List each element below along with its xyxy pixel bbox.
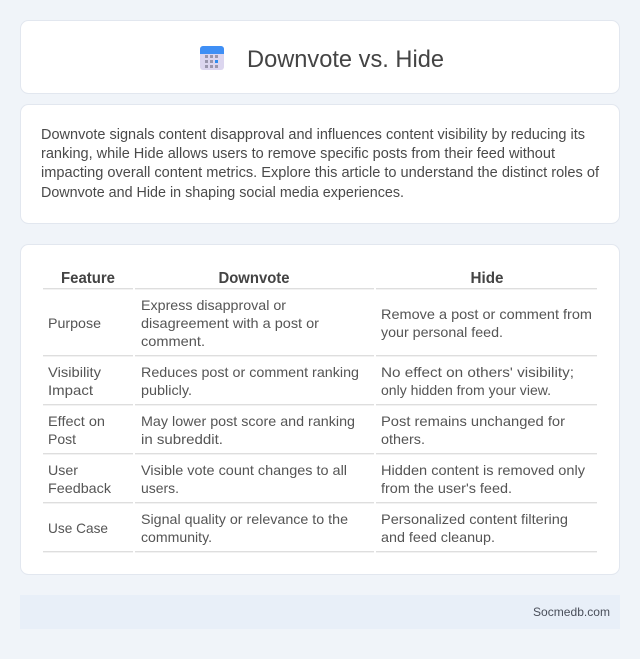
row: effect on post: Post bbox=[48, 431, 76, 447]
footer text: Socmedb.com bbox=[533, 605, 610, 619]
row: effect on post: in subreddit. bbox=[141, 431, 223, 447]
table card bbox=[20, 244, 620, 574]
row: effect on post: others. bbox=[381, 431, 425, 447]
row: visibility impact: publicly. bbox=[141, 382, 192, 398]
intro card bbox=[20, 104, 620, 224]
table header: Feature bbox=[61, 270, 115, 287]
table header: Hide bbox=[470, 270, 504, 287]
row: user feedback: Hidden content is removed only bbox=[381, 462, 585, 478]
row: user feedback: User bbox=[48, 462, 78, 478]
intro text: impacting overall content metrics. Explore this article to understand the distinct roles of bbox=[41, 165, 600, 181]
row: user feedback: from the user's feed. bbox=[381, 480, 512, 496]
row: visibility impact: No effect on others' visibility; bbox=[381, 364, 574, 380]
row: purpose: disagreement with a post or bbox=[141, 315, 319, 331]
title card bbox=[20, 20, 620, 94]
icon: calendar bbox=[200, 46, 224, 70]
intro text: Downvote and Hide in shaping social media experiences. bbox=[41, 185, 404, 201]
row: purpose: comment. bbox=[141, 333, 205, 349]
row: effect on post: Effect on bbox=[48, 413, 105, 429]
row: visibility impact: Visibility bbox=[48, 364, 101, 380]
row: visibility impact bbox=[48, 364, 574, 398]
row: visibility impact: Impact bbox=[48, 382, 93, 398]
row: purpose: your personal feed. bbox=[381, 324, 503, 340]
intro text: ranking, while Hide allows users to remove specific posts from their feed without bbox=[41, 146, 555, 162]
row: use case: Use Case bbox=[48, 520, 108, 536]
row: effect on post: May lower post score and ranking bbox=[141, 413, 355, 429]
title: Downvote vs. Hide bbox=[247, 46, 444, 73]
row: user feedback bbox=[48, 462, 585, 496]
row: use case: Signal quality or relevance to the bbox=[141, 511, 348, 527]
footer bar bbox=[20, 595, 620, 629]
table header: Downvote bbox=[218, 270, 290, 287]
row: user feedback: Feedback bbox=[48, 480, 112, 496]
row: use case: Personalized content filtering bbox=[381, 511, 568, 527]
row: user feedback: Visible vote count changes to all bbox=[141, 462, 347, 478]
row: visibility impact: only hidden from your view. bbox=[381, 382, 551, 398]
intro text bbox=[41, 127, 600, 201]
row: purpose: Purpose bbox=[48, 315, 101, 331]
row: use case: and feed cleanup. bbox=[381, 529, 495, 545]
table header bbox=[61, 270, 504, 287]
intro text: Downvote signals content disapproval and influences content visibility by reducing its bbox=[41, 127, 585, 143]
row: effect on post bbox=[48, 413, 565, 447]
row: purpose: Express disapproval or bbox=[141, 297, 286, 313]
row: visibility impact: Reduces post or comment ranking bbox=[141, 364, 359, 380]
row: purpose: Remove a post or comment from bbox=[381, 306, 592, 322]
row: user feedback: users. bbox=[141, 480, 179, 496]
row: effect on post: Post remains unchanged for bbox=[381, 413, 565, 429]
row: use case bbox=[48, 511, 568, 545]
row: use case: community. bbox=[141, 529, 212, 545]
row: purpose bbox=[48, 297, 592, 349]
